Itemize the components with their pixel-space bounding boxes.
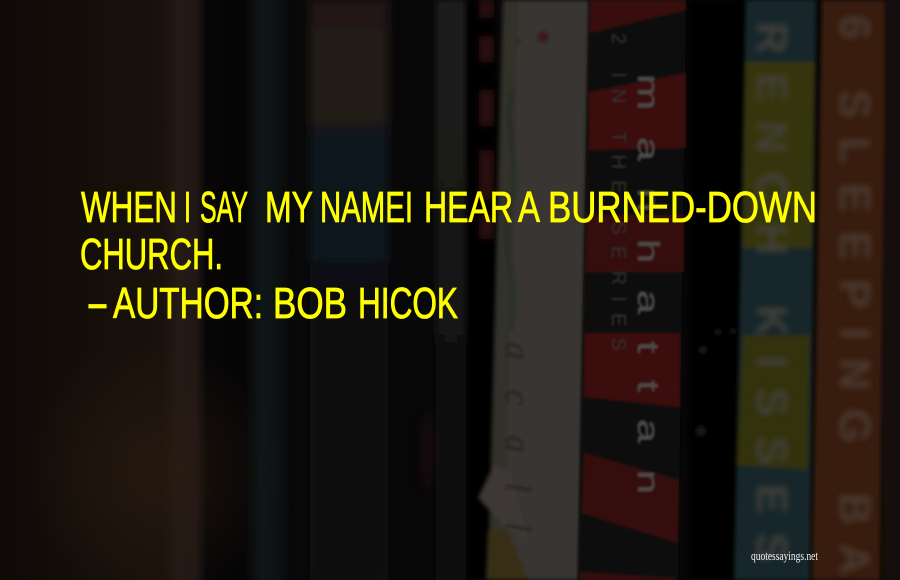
blurred books on the left	[0, 0, 440, 580]
quote line 1: MY	[265, 183, 313, 232]
cream book spine	[478, 0, 589, 580]
watermark: quotessayings.net	[751, 548, 818, 563]
teal and olive book	[734, 0, 816, 580]
book spine lettering: manhattan	[607, 0, 666, 494]
teal and olive book: RENCH KISSES	[747, 22, 796, 562]
black gap between books	[688, 0, 744, 580]
quote line 2: CHURCH.	[80, 230, 223, 279]
author line: BOB	[273, 279, 347, 328]
author line	[86, 279, 458, 328]
quote line 1: SAY	[200, 183, 248, 232]
book spine lettering: manhattan: 2 IN THE SERIES	[607, 33, 629, 351]
quote text	[80, 183, 817, 328]
dotted spine	[436, 0, 496, 580]
quote line 1: HEAR	[424, 183, 513, 232]
red and black striped book	[578, 0, 686, 580]
quote line 1: WHEN	[81, 183, 177, 232]
orange book	[812, 0, 900, 580]
quote line 1: A	[518, 183, 540, 232]
quote line 1: BURNED-DOWN	[548, 183, 817, 232]
orange book: 6 SLEEPING BA	[830, 15, 879, 575]
author line: -	[86, 279, 109, 328]
quote line 1: I	[184, 183, 191, 232]
author line: AUTHOR:	[113, 279, 263, 328]
author line: HICOK	[358, 279, 458, 328]
handwriting on cream book: acall	[498, 342, 538, 532]
quote line 1: NAMEI	[320, 183, 413, 232]
quote line 1	[81, 183, 817, 232]
book spine lettering: manhattan: manhattan	[631, 74, 666, 494]
